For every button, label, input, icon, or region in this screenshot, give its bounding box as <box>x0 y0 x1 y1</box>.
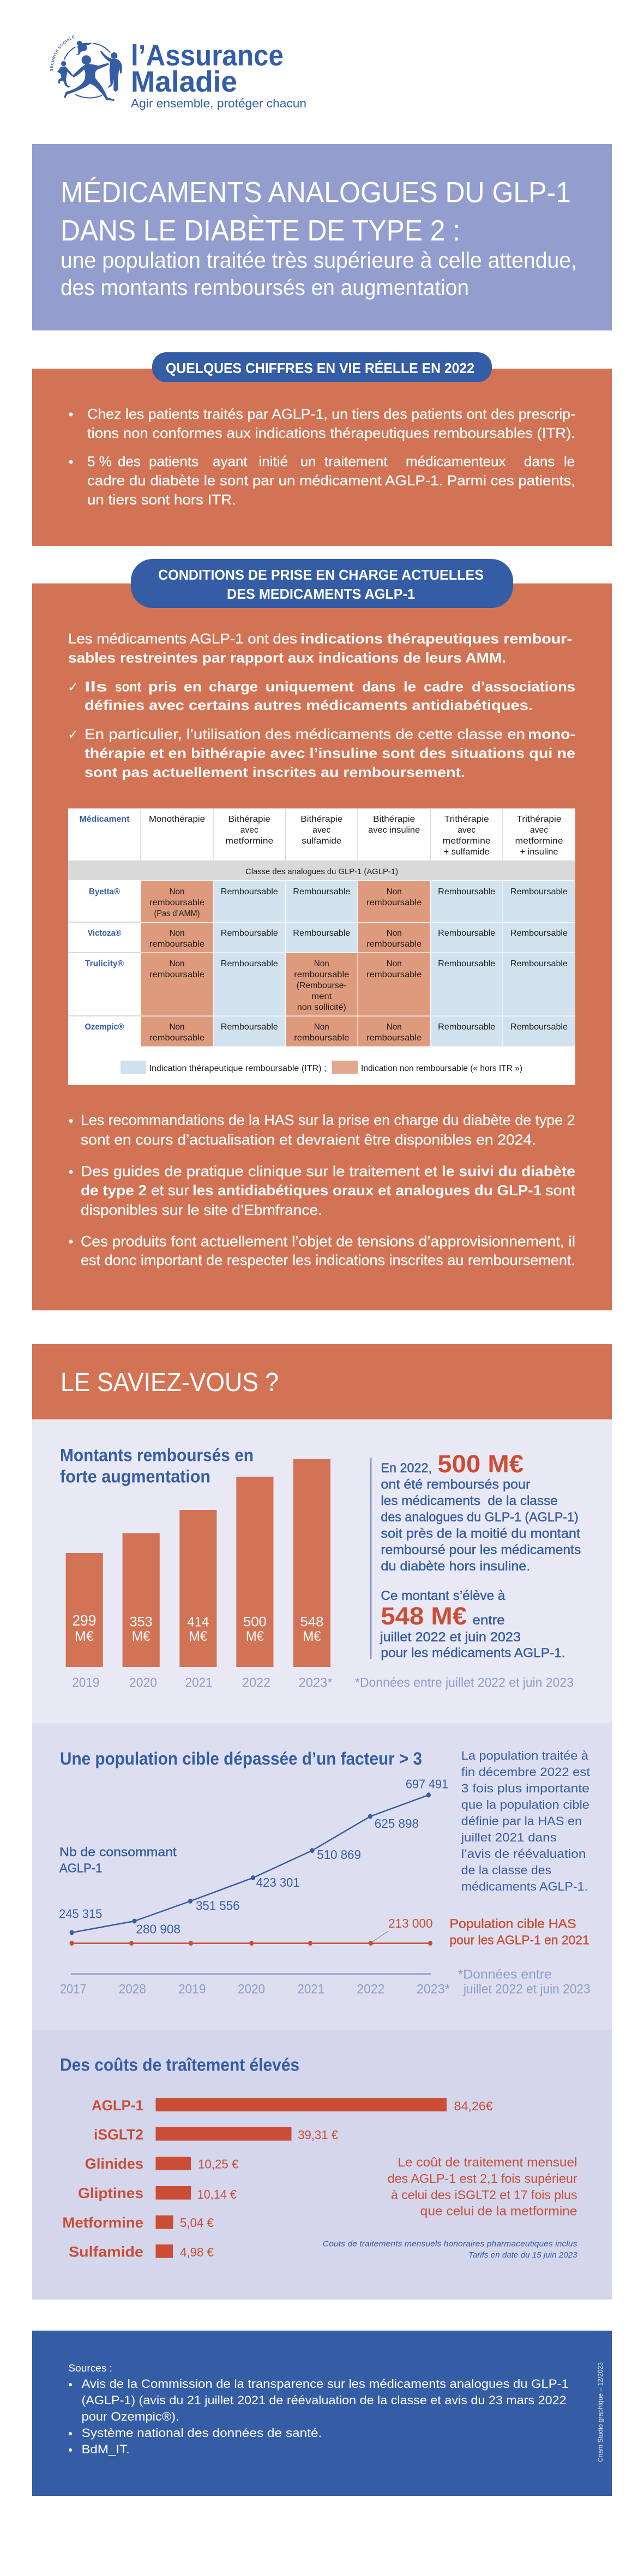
text block: population traitée: médicaments AGLP-1. <box>461 1880 588 1893</box>
table header row: avec <box>312 826 330 835</box>
bar 2020: 353 <box>130 1615 153 1630</box>
check item: associations: cadre <box>424 678 464 695</box>
check item: associations: uniquement <box>266 678 354 695</box>
line chart: consommateurs AGLP-1 <box>59 1777 448 1936</box>
bar: iSGLT2 <box>94 2127 338 2143</box>
table header row: avec <box>458 826 476 835</box>
text block: population traitée: de la classe des <box>461 1863 551 1877</box>
line chart: consommateurs AGLP-1: 625 898 <box>375 1816 419 1831</box>
heading: coûts de traitement: Des coûts de traîtement élevés <box>60 2055 299 2074</box>
panel: main title <box>32 144 612 330</box>
bar 2020: M€ <box>132 1629 151 1644</box>
text block: first bullet: Chez les patients traités par AGLP-1, un tiers des patients ont des prescrip- <box>87 406 575 422</box>
text block: second bullet: un tiers sont hors ITR. <box>87 491 236 508</box>
text block: intro <box>68 630 572 666</box>
table row: Victoza: Remboursable <box>221 929 278 938</box>
bar 2023: M€ <box>303 1629 321 1644</box>
callout: 500 M€ et 548 M€: ont été remboursés pour <box>381 1477 530 1492</box>
bar: iSGLT2: 39,31 € <box>298 2128 338 2142</box>
text block: second bullet: des <box>118 453 141 470</box>
table row: Trulicity: Non <box>314 959 329 968</box>
text block: sources: pour Ozempic®). <box>82 2410 179 2423</box>
callout: coût mensuel: Le coût de traitement mensuel <box>398 2155 577 2169</box>
table header row: avec <box>240 826 258 835</box>
table header row: metformine <box>225 836 273 846</box>
chart axis: années: 2021 <box>298 1982 324 1997</box>
text block: guides de pratique clinique: sont <box>545 1182 576 1199</box>
table header row: Classe des analogues du GLP-1 (AGLP-1) <box>245 867 398 876</box>
heading pill: quelques chiffres <box>152 352 492 382</box>
table row: Byetta: Remboursable <box>293 887 350 896</box>
callout: 500 M€ et 548 M€: Ce montant s’élève à <box>381 1588 505 1603</box>
panel: quelques chiffres <box>32 352 612 546</box>
table row: Byetta: Non <box>387 887 402 896</box>
bar 2023: 2023* <box>299 1676 333 1690</box>
table row: Trulicity: remboursable <box>149 970 204 979</box>
text block: second bullet: un <box>300 453 316 470</box>
note: tarifs: Couts de traitements mensuels honoraires pharmaceutiques inclus <box>323 2239 577 2249</box>
bar 2019: 299 <box>72 1612 96 1629</box>
label: population cible HAS <box>449 1917 589 1947</box>
table header row: Trithérapie <box>517 815 562 824</box>
text block: intro: sables restreintes par rapport aux indications de leurs AMM. <box>68 649 506 666</box>
table row: Trulicity: Non <box>169 959 184 968</box>
text block: second bullet: ayant <box>213 453 248 470</box>
text block: second bullet: cadre du diabète le sont par un médicament AGLP-1. Parmi ces patients, <box>87 472 575 489</box>
callout: 500 M€ et 548 M€: 548 M€ <box>381 1602 467 1630</box>
heading: montants remboursés: Montants remboursés en <box>60 1445 254 1465</box>
table header row: avec <box>530 826 548 835</box>
bar: AGLP-1 <box>92 2097 493 2114</box>
chart axis: années: 2017 <box>60 1982 86 1997</box>
text block: population traitée: l’avis de réévaluation <box>461 1847 586 1861</box>
check item: associations: sont <box>115 678 141 695</box>
line chart: consommateurs AGLP-1: 351 556 <box>196 1899 240 1913</box>
callout: 500 M€ et 548 M€: 500 M€ <box>437 1450 523 1478</box>
bar: Metformine: 5,04 € <box>180 2216 214 2230</box>
table row: Ozempic: Remboursable <box>221 1022 278 1032</box>
table header row: Monothérapie <box>149 815 205 824</box>
callout: 500 M€ et 548 M€: soit près de la moitié du montant <box>381 1526 580 1541</box>
check item: associations: charge <box>209 678 258 695</box>
bar: Gliptines <box>78 2185 237 2201</box>
table row: Victoza: Non <box>169 929 184 938</box>
bar 2020 <box>123 1533 160 1690</box>
check item: associations <box>68 678 575 713</box>
check item: associations: pris <box>148 678 177 695</box>
table header row: + sulfamide <box>444 847 490 857</box>
label: nb de consommants <box>59 1845 177 1875</box>
table row: Trulicity: remboursable <box>366 970 422 979</box>
text block: sources: Sources : <box>68 2363 112 2374</box>
chart axis: années: 2023* <box>417 1982 450 1997</box>
bar 2020: 2020 <box>129 1676 157 1690</box>
bar: Metformine: Metformine <box>62 2214 143 2231</box>
text block: guides de pratique clinique: le suivi du diabète <box>442 1163 575 1179</box>
heading pill: conditions <box>131 559 513 608</box>
text block: population traitée: que la population cible <box>461 1798 589 1811</box>
line chart: consommateurs AGLP-1: 510 869 <box>317 1847 361 1862</box>
table row: Byetta: remboursable <box>149 898 204 907</box>
bar: Glinides <box>85 2156 239 2172</box>
bar 2021: 414 <box>187 1615 209 1630</box>
table header row: Bithérapie <box>373 815 415 824</box>
text block: second bullet: 5 % <box>87 453 112 470</box>
table row: Victoza <box>87 923 575 952</box>
text block: sources: Avis de la Commission de la transparence sur les médicaments analogues du GLP-1 <box>82 2377 569 2391</box>
text block: sources <box>68 2363 569 2456</box>
heading pill: conditions: CONDITIONS DE PRISE EN CHARGE ACTUELLES <box>158 567 484 583</box>
bar 2022: 2022 <box>242 1676 270 1690</box>
heading: population cible: Une population cible dépassée d’un facteur > 3 <box>60 1749 422 1768</box>
text block: guides de pratique clinique: disponibles sur le site d’Ebmfrance. <box>81 1202 322 1218</box>
text block: guides de pratique clinique: de type 2 <box>81 1182 147 1199</box>
footnote: données 2023: *Données entre <box>458 1967 552 1982</box>
check item: associations: définies avec certains autres médicaments antidiabétiques. <box>85 697 533 713</box>
chart axis: années: 2019 <box>178 1982 206 1997</box>
text block: second bullet: dans <box>524 453 555 470</box>
logo wordmark: l’Assurance <box>131 39 284 72</box>
subtitle: une population traitée très supérieure à celle attendue, <box>61 248 577 273</box>
table row: Ozempic: Ozempic® <box>85 1022 124 1032</box>
table row: Trulicity: (Rembourse- <box>297 981 347 990</box>
table row: Byetta: Non <box>169 887 184 896</box>
check item: monothérapie: En particulier, l’utilisation des médicaments de cette classe en <box>85 726 525 742</box>
table row: Ozempic <box>85 1016 575 1046</box>
bar chart: montants par année <box>66 1459 333 1690</box>
panel: sources <box>32 2331 612 2496</box>
bar 2023: 548 <box>300 1615 324 1630</box>
callout: coût mensuel: à celui des iSGLT2 et 17 fois plus <box>391 2188 577 2202</box>
panel: le saviez-vous heading: LE SAVIEZ-VOUS ? <box>61 1368 279 1397</box>
table row: Victoza: remboursable <box>149 940 204 949</box>
check item: associations: en <box>184 678 202 695</box>
check item: monothérapie: ✓ <box>68 727 79 742</box>
bar 2022: M€ <box>246 1629 264 1644</box>
line chart: population cible HAS <box>70 1916 433 1946</box>
text block: intro: indications thérapeutiques rembour- <box>300 630 572 647</box>
line chart: consommateurs AGLP-1: 280 908 <box>136 1922 180 1936</box>
callout: 500 M€ et 548 M€: remboursé pour les médicaments <box>381 1543 581 1557</box>
text block: second bullet <box>69 453 575 508</box>
table row: Byetta: Remboursable <box>221 887 278 896</box>
text block: sources: BdM_IT. <box>82 2442 130 2456</box>
text block: second bullet: traitement <box>324 453 388 470</box>
bar chart: coûts mensuels <box>62 2097 493 2260</box>
panel: conditions de prise en charge <box>32 559 612 1310</box>
table row: Ozempic: Non <box>169 1022 184 1032</box>
title <box>61 176 571 247</box>
bar 2023 <box>293 1459 333 1690</box>
subtitle: des montants remboursés en augmentation <box>61 275 469 300</box>
check item: associations: Ils <box>85 678 107 695</box>
text block: population traitée: La population traitée à <box>461 1749 589 1762</box>
chart axis: années: 2022 <box>357 1982 384 1997</box>
bar 2019: 2019 <box>72 1676 99 1690</box>
table row: Ozempic: Non <box>387 1022 402 1032</box>
table row: Trulicity: Remboursable <box>510 959 568 968</box>
table row: Trulicity: non sollicité) <box>297 1003 346 1012</box>
icon: running family emblem: SÉCURITÉ SOCIALE <box>50 35 75 71</box>
bar: Glinides: Glinides <box>85 2156 143 2172</box>
callout: coût mensuel: que celui de la metformine <box>420 2204 577 2218</box>
logo wordmark <box>131 39 306 110</box>
callout: coût mensuel <box>388 2155 577 2218</box>
table row: Byetta: (Pas d’AMM) <box>154 909 200 918</box>
table header row: + insuline <box>520 847 558 857</box>
table row: Ozempic: Non <box>314 1022 329 1032</box>
text block: second bullet: initié <box>258 453 288 470</box>
panel: coûts de traitement <box>32 2030 612 2300</box>
check item: associations: ✓ <box>68 679 79 695</box>
bar: Sulfamide: 4,98 € <box>180 2245 214 2259</box>
chart axis: années: 2028 <box>119 1982 146 1997</box>
text block: second bullet: patients <box>149 453 198 470</box>
callout: 500 M€ et 548 M€ <box>370 1450 581 1660</box>
table row: Byetta: Remboursable <box>510 887 568 896</box>
callout: 500 M€ et 548 M€: les médicaments de la classe <box>381 1494 558 1508</box>
heading pill: conditions: DES MEDICAMENTS AGLP-1 <box>227 586 415 602</box>
table header row <box>80 815 563 876</box>
bar 2021: 2021 <box>185 1676 213 1690</box>
bar: Sulfamide: Sulfamide <box>69 2244 143 2260</box>
table row: Victoza: remboursable <box>366 940 422 949</box>
text block: sources: (AGLP-1) (avis du 21 juillet 2021 de réévaluation de la classe et avis du 23 mars 2022 <box>82 2393 567 2407</box>
table row: Ozempic: Remboursable <box>510 1022 568 1032</box>
table row: Victoza: Remboursable <box>438 929 495 938</box>
bar: Glinides: 10,25 € <box>198 2157 239 2171</box>
check item: associations: d’associations <box>472 678 575 695</box>
bar 2019 <box>66 1553 103 1690</box>
table header row: Trithérapie <box>444 815 489 824</box>
bar: Gliptines: Gliptines <box>78 2185 143 2201</box>
table row: Victoza: Remboursable <box>510 929 568 938</box>
text block: tensions d'approvisionnement: est donc important de respecter les indications inscrites au remboursement. <box>81 1252 575 1268</box>
table legend: Indication thérapeutique remboursable (ITR) ; <box>149 1064 326 1073</box>
table row: Trulicity: Non <box>387 959 402 968</box>
logo: l'Assurance Maladie <box>50 35 306 110</box>
callout: 500 M€ et 548 M€: du diabète hors insuline. <box>381 1559 530 1574</box>
text block: second bullet: le <box>564 453 575 470</box>
text block: second bullet: médicamenteux <box>406 453 506 470</box>
logo wordmark: Agir ensemble, protéger chacun <box>131 97 306 110</box>
callout: 500 M€ et 548 M€: En 2022, <box>381 1461 432 1476</box>
table row: Ozempic: remboursable <box>366 1033 422 1043</box>
title: DANS LE DIABÈTE DE TYPE 2 : <box>61 214 460 247</box>
table row: Byetta: remboursable <box>366 898 422 907</box>
line chart: consommateurs AGLP-1: 423 301 <box>256 1875 300 1889</box>
icon: running family emblem <box>50 35 122 101</box>
chart axis: années: 2020 <box>238 1982 265 1997</box>
heading: montants remboursés <box>60 1445 254 1486</box>
table row: Trulicity: remboursable <box>294 970 349 979</box>
text block: guides de pratique clinique <box>69 1163 576 1218</box>
text block: population traitée: 3 fois plus importante <box>461 1781 589 1795</box>
bar: Sulfamide <box>69 2244 214 2260</box>
table row: Victoza: Remboursable <box>293 929 350 938</box>
text block: population traitée: définie par la HAS en <box>461 1814 582 1828</box>
table: remboursement par association <box>68 808 575 1085</box>
text block: population traitée: fin décembre 2022 est <box>461 1765 591 1779</box>
bar: iSGLT2: iSGLT2 <box>94 2127 143 2143</box>
bar: Gliptines: 10,14 € <box>197 2187 237 2201</box>
line chart: consommateurs AGLP-1: 245 315 <box>59 1906 102 1921</box>
callout: coût mensuel: des AGLP-1 est 2,1 fois supérieur <box>388 2171 577 2186</box>
subtitle <box>61 248 577 300</box>
text block: tensions d'approvisionnement <box>69 1233 575 1268</box>
bar: Metformine <box>62 2214 214 2231</box>
text block: recommandations HAS: Les recommandations de la HAS sur la prise en charge du diabète de type 2 <box>81 1112 575 1128</box>
bar: AGLP-1: AGLP-1 <box>92 2097 143 2114</box>
bar 2019: M€ <box>75 1629 94 1644</box>
check item: associations: le <box>404 678 416 695</box>
panel: le saviez-vous heading <box>32 1344 612 1419</box>
callout: 500 M€ et 548 M€: entre <box>472 1613 505 1628</box>
table row: Victoza: Victoza® <box>87 929 122 938</box>
text block: first bullet <box>69 406 575 441</box>
bar 2021: M€ <box>189 1629 207 1644</box>
table legend: Indication non remboursable (« hors ITR ») <box>361 1064 522 1073</box>
check item: associations: dans <box>362 678 396 695</box>
table row: Victoza: Non <box>387 929 402 938</box>
table row: Trulicity: Remboursable <box>438 959 495 968</box>
text block: guides de pratique clinique: et sur <box>151 1182 189 1199</box>
check item: monothérapie: mono- <box>528 726 575 742</box>
table row: Trulicity: Remboursable <box>221 959 278 968</box>
note: tarifs: Tarifs en date du 15 juin 2023 <box>468 2250 577 2260</box>
label: nb de consommants: Nb de consommant <box>59 1845 177 1859</box>
bar 2022: 500 <box>243 1615 267 1630</box>
label: population cible HAS: pour les AGLP-1 en 2021 <box>449 1933 589 1947</box>
text block: sources: Système national des données de santé. <box>82 2426 322 2440</box>
check item: monothérapie: thérapie et en bithérapie avec l’insuline sont des situations qui ne <box>85 745 575 761</box>
table row: Ozempic: remboursable <box>294 1033 349 1043</box>
title: MÉDICAMENTS ANALOGUES DU GLP-1 <box>61 176 571 209</box>
table row: Byetta: Byetta® <box>89 887 120 896</box>
table row: Trulicity: Trulicity® <box>85 959 124 968</box>
panel: population cible <box>32 1723 612 2030</box>
label: population cible HAS: Population cible HAS <box>449 1917 576 1931</box>
heading: montants remboursés: forte augmentation <box>60 1467 210 1486</box>
line chart: population cible HAS: 213 000 <box>388 1916 433 1930</box>
note: tarifs <box>323 2239 577 2260</box>
text block: recommandations HAS: sont en cours d’actualisation et devraient être disponibles en 2024. <box>81 1131 536 1148</box>
text block: first bullet: tions non conformes aux indications thérapeutiques remboursables (ITR). <box>87 425 575 441</box>
bar: AGLP-1: 84,26€ <box>454 2099 493 2113</box>
text block: recommandations HAS <box>69 1112 575 1148</box>
check item: monothérapie <box>68 726 575 780</box>
footnote: données 2023: *Données entre juillet 2022 et juin 2023 <box>355 1676 574 1690</box>
table header row: metformine <box>443 836 491 846</box>
text block: population traitée: juillet 2021 dans <box>461 1831 557 1844</box>
table row: Byetta <box>89 881 575 922</box>
callout: 500 M€ et 548 M€: des analogues du GLP-1 (AGLP-1) <box>381 1510 579 1525</box>
line chart: consommateurs AGLP-1: 697 491 <box>406 1777 448 1791</box>
bar 2021 <box>179 1510 217 1690</box>
table header row: sulfamide <box>302 836 341 846</box>
table header row: Bithérapie <box>228 815 270 824</box>
footnote: données 2023 <box>458 1967 591 1997</box>
text block: guides de pratique clinique: les antidiabétiques oraux et analogues du GLP-1 <box>192 1182 541 1199</box>
bar 2022 <box>236 1477 274 1690</box>
table row: Byetta: Remboursable <box>438 887 495 896</box>
text block: population traitée <box>461 1749 591 1893</box>
credit: studio graphique: Cnam Studio graphique – 12/2023 <box>597 2362 604 2462</box>
text block: tensions d'approvisionnement: Ces produits font actuellement l’objet de tensions d’approvisionnement, il <box>81 1233 575 1250</box>
callout: 500 M€ et 548 M€: juillet 2022 et juin 2023 <box>380 1630 521 1645</box>
table header row: metformine <box>515 836 563 846</box>
chart axis: années <box>60 1973 450 1997</box>
table header row: Bithérapie <box>300 815 342 824</box>
text block: intro: Les médicaments AGLP-1 ont des <box>68 630 297 647</box>
table row: Ozempic: Remboursable <box>438 1022 495 1032</box>
table header row: Médicament <box>80 815 130 824</box>
heading pill: quelques chiffres: QUELQUES CHIFFRES EN VIE RÉELLE EN 2022 <box>166 360 474 376</box>
footnote: données 2023: juillet 2022 et juin 2023 <box>463 1982 591 1997</box>
logo wordmark: Maladie <box>131 65 237 98</box>
table legend <box>121 1061 522 1074</box>
callout: 500 M€ et 548 M€: pour les médicaments AGLP-1. <box>381 1646 565 1660</box>
table row: Ozempic: remboursable <box>149 1033 204 1043</box>
panel: montants remboursés <box>32 1419 612 1723</box>
label: nb de consommants: AGLP-1 <box>59 1861 102 1875</box>
table header row: avec insuline <box>368 826 420 835</box>
table row: Trulicity <box>85 953 575 1015</box>
table row: Trulicity: ment <box>311 992 332 1001</box>
text block: guides de pratique clinique: Des guides de pratique clinique sur le traitement et <box>81 1163 438 1179</box>
check item: monothérapie: sont pas actuellement inscrites au remboursement. <box>85 764 465 780</box>
